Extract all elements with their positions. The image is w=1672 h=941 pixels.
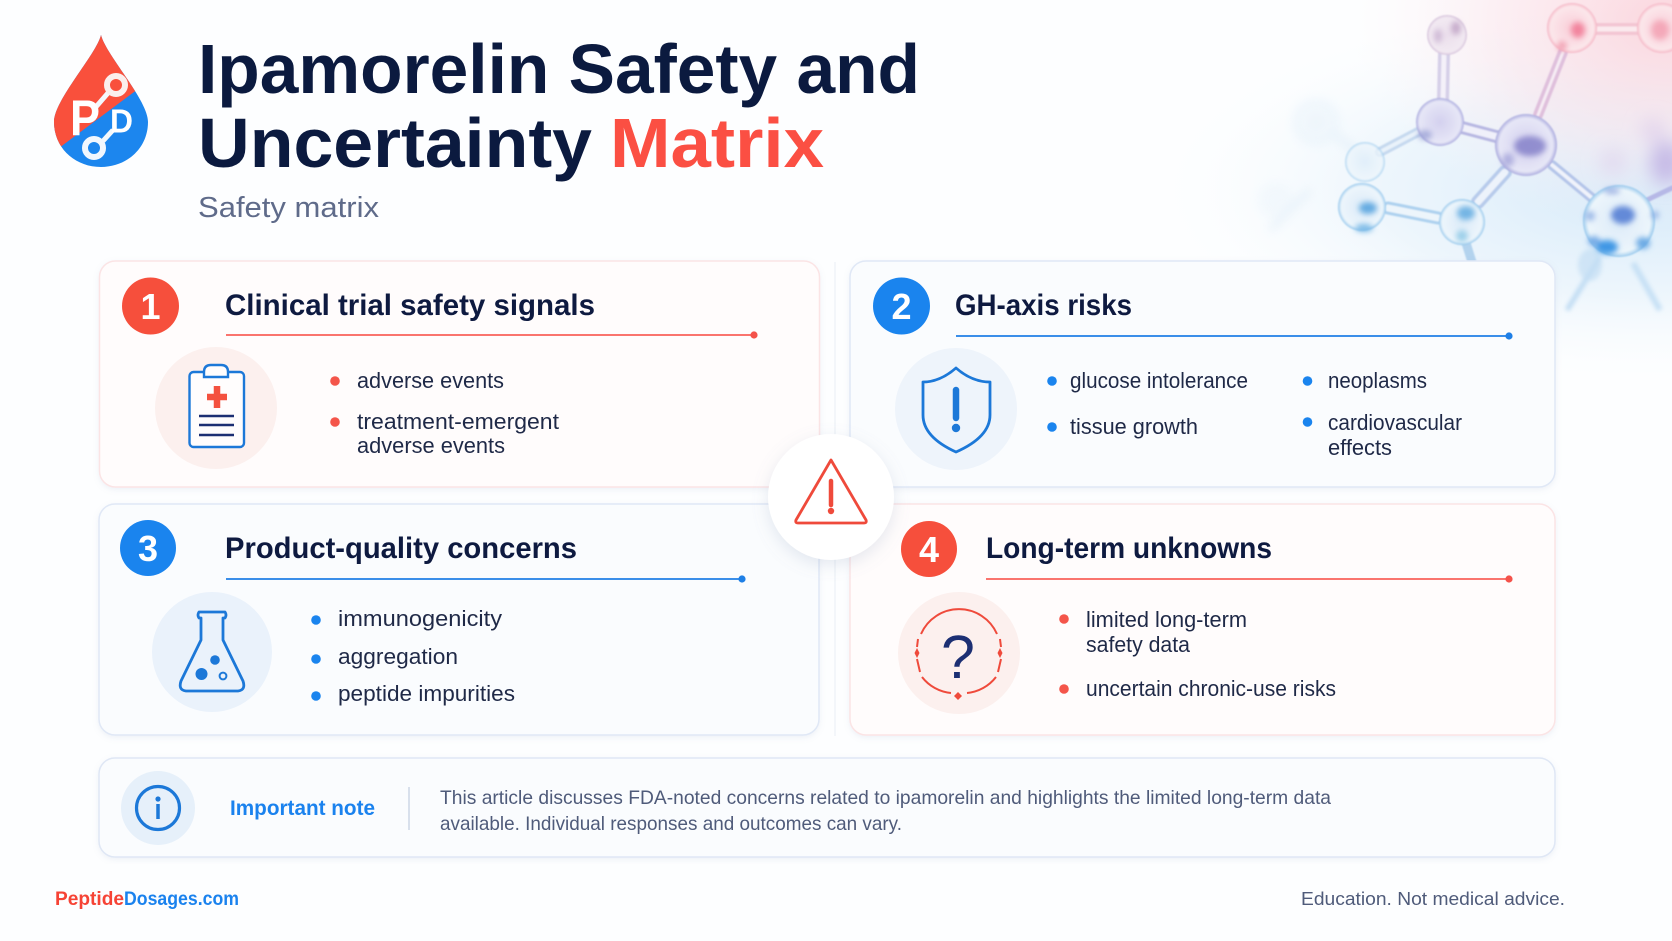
title [198,30,920,182]
number badge 2 [873,278,930,334]
bullet list 1: adverse events [357,433,505,458]
bullet list 3 [311,606,515,706]
panel 4: long-term unknowns [850,504,1555,735]
title: Uncertainty [198,104,592,182]
important note panel [99,758,1555,857]
heading 3: Product-quality concerns [225,532,577,565]
heading rule 2 [956,332,1513,340]
heading rule 3 [226,575,746,583]
icon: flask [152,592,272,712]
heading 4: Long-term unknowns [986,532,1272,565]
bullet list 4 [1059,607,1336,701]
note text: available. Individual responses and outcomes can vary. [440,813,902,835]
bullet list 1 [330,368,559,458]
number badge 4: 4 [919,529,939,570]
bullet list 1: treatment-emergent [357,409,559,434]
bullet list 3: immunogenicity [338,606,502,631]
central warning badge [768,434,894,560]
panel 3: product-quality concerns [99,504,819,735]
background molecule illustration [1100,0,1672,400]
bullet list 4: uncertain chronic-use risks [1086,676,1336,701]
title: Matrix [610,104,824,182]
panel 1: clinical trial safety signals [100,261,820,487]
atoms [1338,3,1672,257]
bullet list 3: aggregation [338,644,458,669]
bullet list 4: limited long-term [1086,607,1247,632]
number badge 1: 1 [140,286,161,327]
logo: PeptideDosages droplet: P [70,90,100,146]
icon: question mark in dashed ring [898,592,1020,714]
icon: warning triangle [796,460,866,523]
note text [440,787,1331,835]
icon: clipboard [155,347,277,469]
footer brand [55,889,239,910]
logo: PeptideDosages droplet: D [110,102,133,140]
icon: info [121,771,195,845]
number badge 3 [120,520,176,576]
heading rule 1 [226,331,758,339]
bullet list 3: peptide impurities [338,681,515,706]
note text: This article discusses FDA-noted concerns related to ipamorelin and highlights the limited long-term data [440,787,1331,809]
footer brand: Dosages.com [124,889,239,910]
bullet list 4: safety data [1086,632,1191,657]
number badge 2: 2 [891,286,912,327]
bullet list 2: glucose intolerance [1070,368,1248,393]
number badge 4 [901,521,957,577]
panel 2: GH-axis risks [850,261,1555,487]
bullet list 1: adverse events [357,368,504,393]
note label: Important note [230,797,375,820]
subtitle: Safety matrix [198,192,380,224]
number badge 3: 3 [138,528,158,569]
heading rule 4 [986,575,1513,583]
logo: PeptideDosages droplet [54,35,148,167]
heading 1: Clinical trial safety signals [225,289,595,322]
icon: question mark in dashed ring: ? [941,623,975,691]
bullet list 2: cardiovascular [1328,410,1462,435]
icon: shield [895,348,1017,470]
bullet list 2 [1047,368,1462,460]
bullet list 2: tissue growth [1070,414,1198,439]
bullet list 2: effects [1328,435,1392,460]
bullet list 2: neoplasms [1328,368,1427,393]
number badge 1 [122,278,179,334]
heading 2: GH-axis risks [955,289,1132,322]
footer disclaimer: Education. Not medical advice. [1301,888,1565,909]
title: Ipamorelin Safety and [198,30,920,108]
footer brand: Peptide [55,889,124,910]
